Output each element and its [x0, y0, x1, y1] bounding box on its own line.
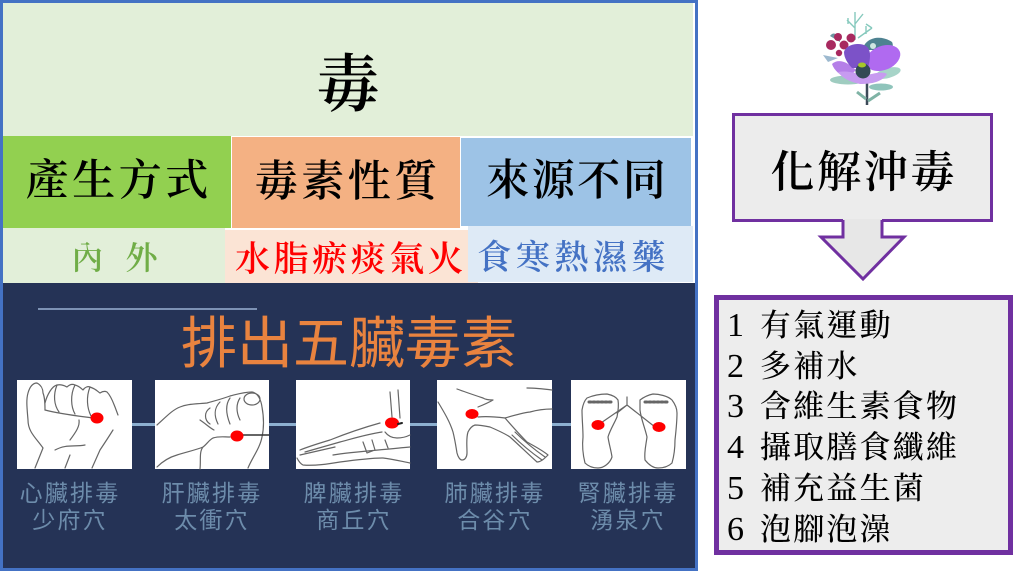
text: inside and outside: 內 外 — [71, 240, 160, 276]
list item 1: 有氣運動 — [760, 308, 893, 343]
arrow: down to list — [818, 219, 908, 281]
heading: different sources — [461, 138, 691, 226]
text: inside and outside — [3, 228, 225, 283]
list item 4: 攝取膳食纖維 — [760, 430, 959, 465]
connector line — [128, 423, 578, 426]
label: kidney: 腎臟排毒 — [578, 480, 678, 506]
box: detox heading: 化解沖毒 — [770, 148, 957, 196]
icon: feet soles, yongquan point — [571, 380, 686, 469]
icon: flower — [823, 12, 901, 105]
label: liver: 肝臟排毒 — [162, 480, 262, 506]
label: liver: 太衝穴 — [174, 507, 250, 533]
text: source types — [468, 226, 693, 282]
list item 1: 1 — [727, 307, 746, 344]
heading: toxin nature: 毒素性質 — [255, 158, 441, 206]
label: liver — [162, 480, 262, 533]
list item 5: 補充益生菌 — [760, 471, 926, 506]
label: lung — [445, 480, 545, 533]
label: spleen: 商丘穴 — [316, 507, 392, 533]
heading: expel toxins from five organs: 排出五臟毒素 — [181, 312, 517, 374]
list item 6: 6 — [727, 511, 746, 548]
list item 3: 3 — [727, 388, 746, 425]
text: source types: 食寒熱濕藥 — [478, 240, 670, 276]
icon: hand, shaofu point — [17, 380, 132, 469]
label: heart: 少府穴 — [32, 507, 108, 533]
box: detox heading — [732, 113, 993, 222]
panel: toxin overview — [0, 0, 698, 571]
label: heart — [20, 480, 120, 533]
label: lung: 合谷穴 — [457, 507, 533, 533]
label: spleen — [304, 480, 404, 533]
title banner: 毒 — [316, 50, 380, 120]
heading: toxin nature — [232, 137, 460, 228]
list item 3: 含維生素食物 — [760, 389, 959, 424]
label: kidney — [578, 480, 678, 533]
list item 5: 5 — [727, 470, 746, 507]
acupoint diagrams — [17, 380, 686, 470]
list item 2: 多補水 — [760, 349, 860, 384]
label: heart: 心臟排毒 — [20, 480, 120, 506]
panel: five organ detox — [3, 283, 695, 568]
label: spleen: 脾臟排毒 — [304, 480, 404, 506]
list item 6: 泡腳泡澡 — [760, 512, 893, 547]
heading: production method — [3, 136, 231, 228]
list item 2: 2 — [727, 348, 746, 385]
label: kidney: 湧泉穴 — [590, 507, 666, 533]
heading: different sources: 來源不同 — [486, 158, 668, 205]
text: toxin types: 水脂瘀痰氣火 — [235, 240, 467, 278]
heading: production method: 產生方式 — [26, 158, 212, 205]
icon: hand, hegu point — [437, 380, 552, 469]
icon: foot, taichong point — [155, 380, 269, 469]
icon: foot side view, shangqiu point — [296, 380, 410, 469]
panel: detox methods list — [714, 295, 1013, 555]
list item 4: 4 — [727, 429, 746, 466]
label: lung: 肺臟排毒 — [445, 480, 545, 506]
title banner — [3, 3, 693, 136]
text: toxin types — [225, 230, 478, 283]
accent line — [38, 308, 257, 310]
